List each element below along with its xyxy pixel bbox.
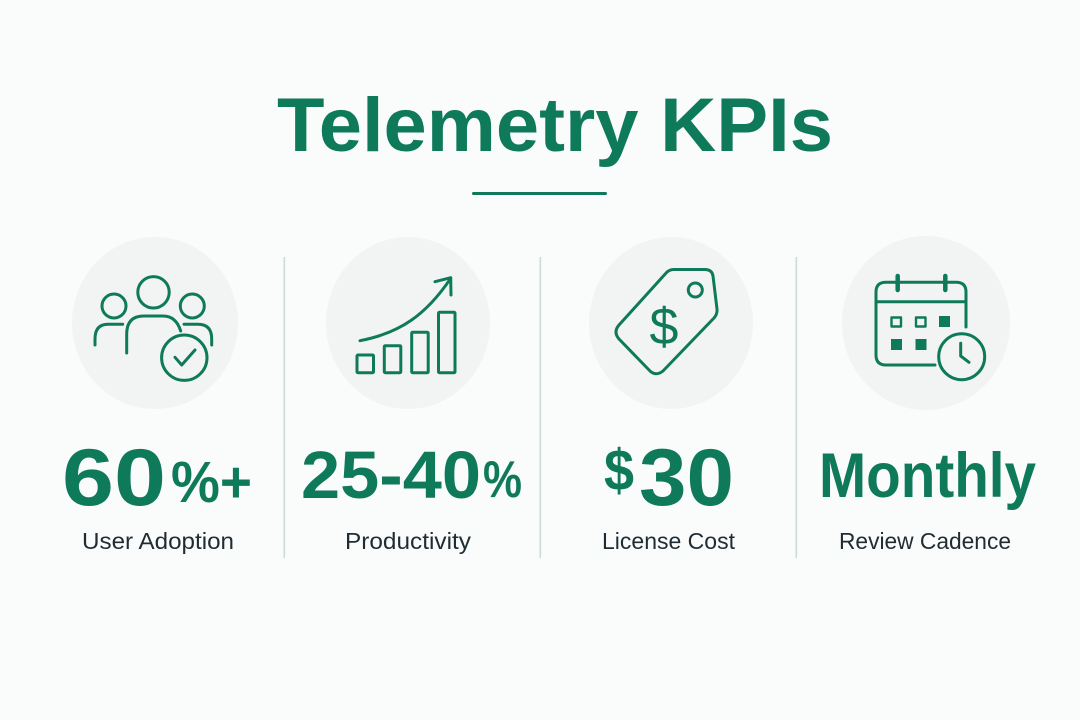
- panel: review cadence: [819, 236, 1036, 554]
- panel: user adoption: [62, 237, 252, 554]
- value: $30: $: [604, 438, 634, 503]
- label: productivity: Productivity: [345, 528, 471, 554]
- title underline: [472, 192, 607, 195]
- value: 60%+: [62, 433, 252, 523]
- icon: calendar with clock: [842, 236, 1010, 410]
- panel: productivity: [301, 237, 522, 554]
- value: $30: 30: [639, 433, 734, 523]
- value: 25-40%: 25-40: [301, 438, 481, 513]
- icon: rising bar chart: [326, 237, 490, 409]
- panel: license cost: [589, 237, 753, 554]
- value: $30: [604, 433, 734, 523]
- label: license cost: License Cost: [602, 528, 735, 554]
- icon: price tag: $: [650, 298, 679, 356]
- icon: price tag: [589, 237, 753, 409]
- value: 60%+: 60: [62, 433, 166, 523]
- value: 25-40%: %: [483, 451, 522, 509]
- value: 60%+: %+: [171, 450, 252, 515]
- icon: users with check: [72, 237, 238, 409]
- title: Telemetry KPIs: [277, 83, 833, 168]
- label: review cadence: Review Cadence: [839, 528, 1011, 554]
- value: monthly: Monthly: [819, 441, 1036, 511]
- label: user adoption: User Adoption: [82, 528, 234, 554]
